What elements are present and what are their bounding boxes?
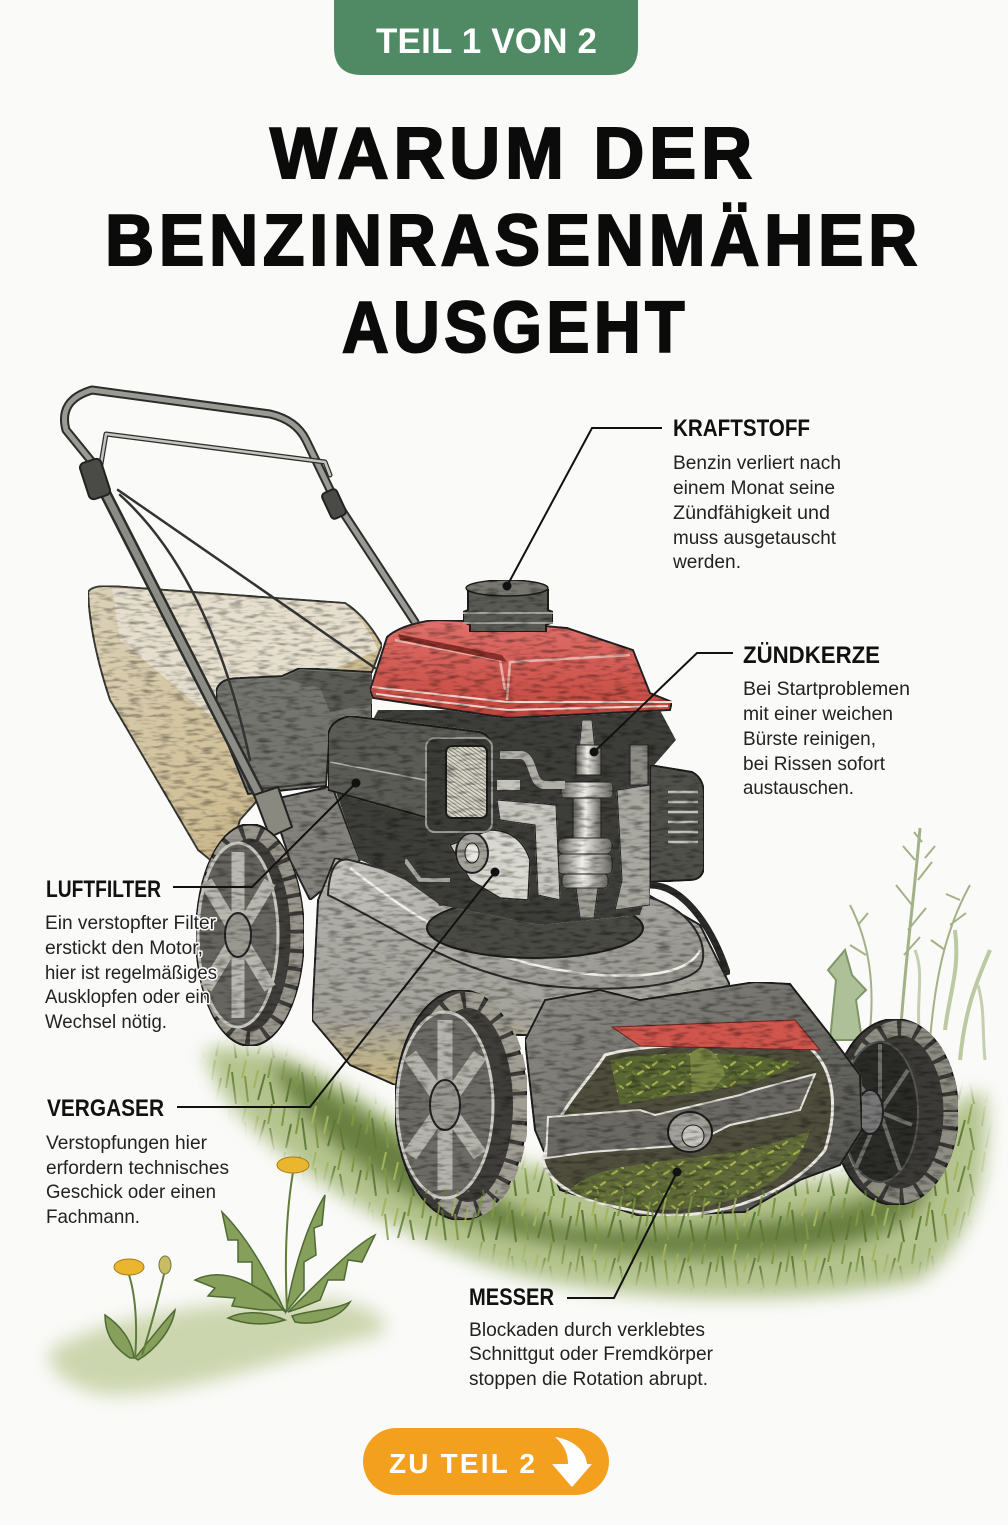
- title: [105, 114, 922, 368]
- callout: Luftfilter: Ausklopfen oder ein: [45, 986, 210, 1008]
- callout: Kraftstoff: Zündfähigkeit und: [673, 502, 830, 524]
- callout: Messer: MESSER: [469, 1284, 554, 1311]
- callout: Luftfilter: erstickt den Motor,: [45, 937, 203, 959]
- callout: Vergaser: Fachmann.: [46, 1206, 140, 1228]
- spark plug and engine parts: [405, 720, 650, 918]
- grass in front of wheels: [380, 1190, 900, 1240]
- callout: Messer: [469, 1168, 713, 1390]
- callout: Messer: Blockaden durch verklebtes: [469, 1319, 705, 1341]
- callout: Messer: stoppen die Rotation abrupt.: [469, 1368, 708, 1390]
- button: zu Teil 2: [363, 1428, 609, 1495]
- grass blades: [211, 1040, 992, 1290]
- callout: Luftfilter: Wechsel nötig.: [45, 1011, 167, 1033]
- front housing: [525, 982, 862, 1216]
- top tab: part 1 of 2: TEIL 1 VON 2: [376, 22, 597, 61]
- icon: curved down arrow: [552, 1437, 592, 1486]
- callout: Vergaser: [46, 868, 500, 1228]
- engine block background: [335, 710, 676, 925]
- callout: Vergaser: Verstopfungen hier: [46, 1132, 207, 1154]
- grass catcher bag: [88, 586, 382, 872]
- title: WARUM DER: [270, 114, 757, 194]
- red engine cover: [370, 620, 672, 718]
- air filter box: [328, 716, 493, 833]
- top tab: part 1 of 2: [334, 0, 638, 75]
- button: zu Teil 2: ZU TEIL 2: [389, 1448, 535, 1479]
- callout: Kraftstoff: Benzin verliert nach: [673, 452, 841, 474]
- grass under the mower: [180, 1030, 1000, 1310]
- callout: Kraftstoff: werden.: [672, 551, 741, 573]
- right front wheel: [832, 1019, 958, 1205]
- mower deck: [312, 858, 730, 1085]
- callout: Luftfilter: [45, 778, 360, 1033]
- callout: Zündkerze: Bürste reinigen,: [743, 728, 876, 750]
- callout: Kraftstoff: [502, 415, 841, 590]
- dandelions lower left: [49, 1157, 384, 1395]
- recoil starter housing: [650, 765, 704, 882]
- center front wheel: [395, 990, 527, 1220]
- callout: Zündkerze: mit einer weichen: [743, 703, 893, 725]
- callout: Messer: Schnittgut oder Fremdkörper: [469, 1343, 713, 1365]
- callout: Vergaser: Geschick oder einen: [46, 1181, 216, 1203]
- chassis behind engine: [216, 668, 372, 900]
- callout: Vergaser: erfordern technisches: [46, 1157, 229, 1179]
- fuel cap: [463, 580, 553, 632]
- callout: Luftfilter: hier ist regelmäßiges: [45, 962, 217, 984]
- callout: Luftfilter: Ein verstopfter Filter: [45, 912, 216, 934]
- callout: Kraftstoff: muss ausgetauscht: [673, 527, 837, 549]
- title: AUSGEHT: [342, 288, 689, 368]
- back handle and control bail: [64, 390, 415, 837]
- callout: Zündkerze: [590, 642, 910, 799]
- illustration: lawn mower on grass: [49, 390, 1000, 1395]
- callout: Zündkerze: austauschen.: [743, 777, 854, 799]
- callout: Kraftstoff: einem Monat seine: [673, 477, 835, 499]
- callout: Vergaser: VERGASER: [47, 1095, 164, 1122]
- callout: Zündkerze: bei Rissen sofort: [743, 753, 886, 775]
- right side weeds: [828, 828, 990, 1060]
- callout: Kraftstoff: KRAFTSTOFF: [673, 415, 810, 442]
- callout: Zündkerze: Bei Startproblemen: [743, 678, 910, 700]
- title: BENZINRASENMÄHER: [105, 201, 922, 281]
- callout: Zündkerze: ZÜNDKERZE: [743, 642, 880, 669]
- callout: Luftfilter: LUFTFILTER: [46, 876, 161, 903]
- rear wheel: [196, 824, 304, 1046]
